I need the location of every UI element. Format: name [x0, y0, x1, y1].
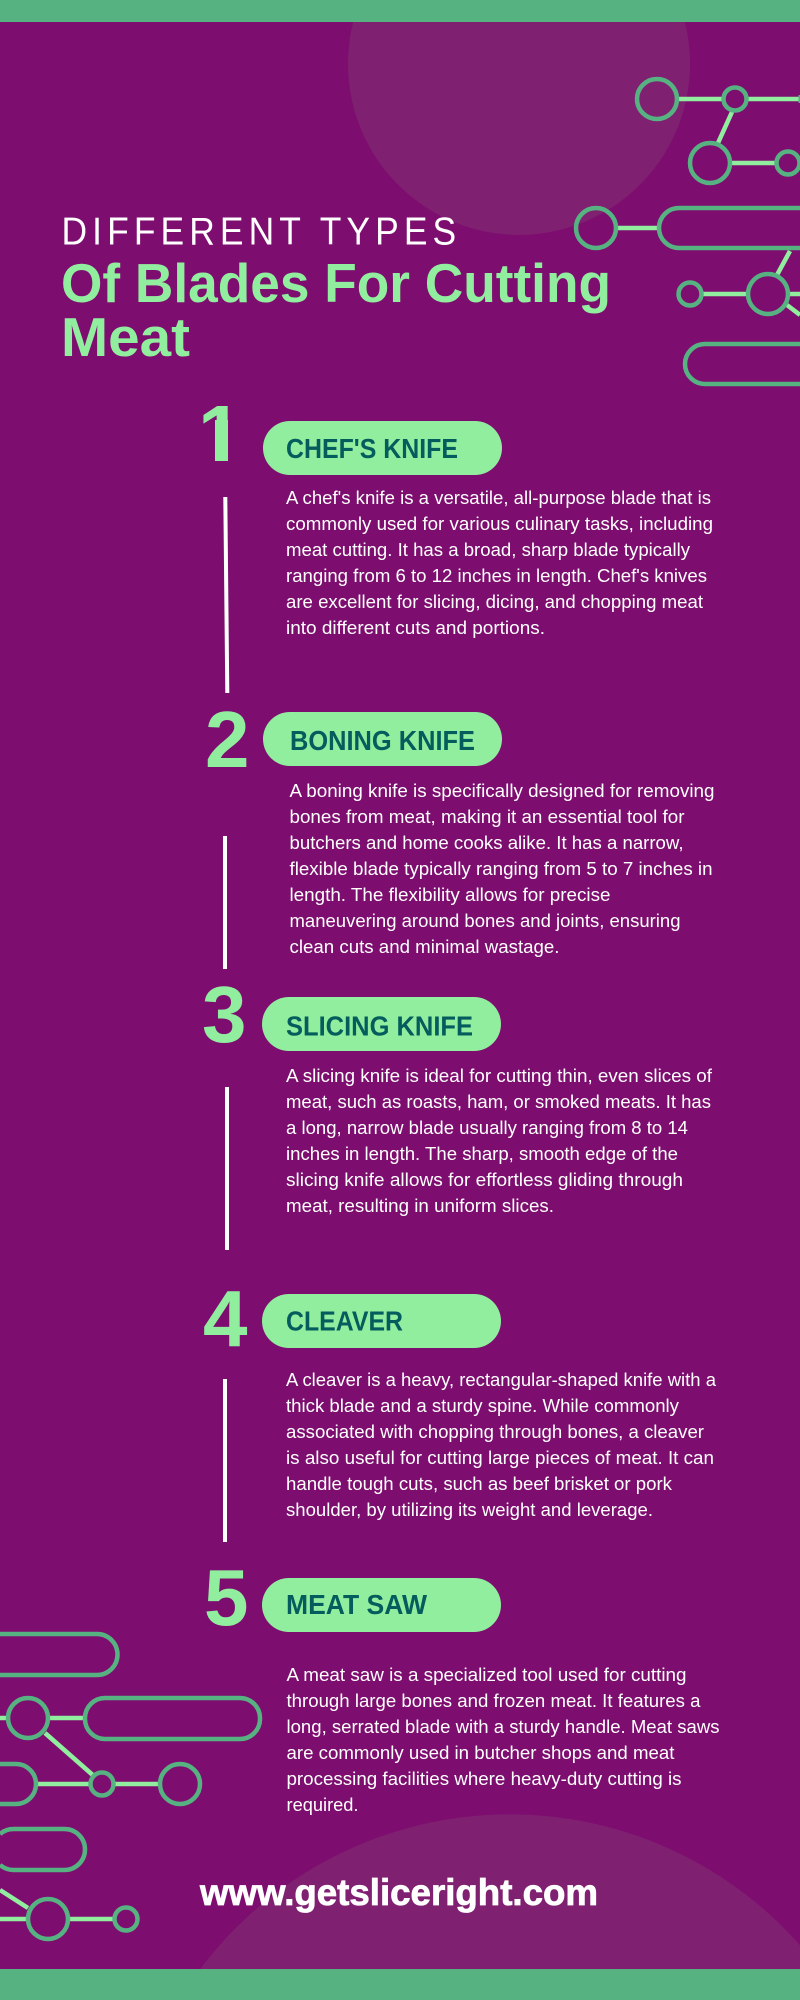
section 4: cleaver — [203, 1274, 717, 1542]
heading pill: chef's knife: CHEF'S KNIFE — [286, 433, 458, 464]
number 1: 1 — [198, 389, 242, 478]
heading pill: boning knife: BONING KNIFE — [290, 725, 475, 756]
heading pill: boning knife — [263, 712, 502, 766]
body text 2: length. The flexibility allows for precise — [290, 884, 610, 905]
body text 2: maneuvering around bones and joints, ensuring — [290, 910, 680, 931]
body text 2: A boning knife is specifically designed for removing — [290, 780, 714, 801]
body text 1: A chef's knife is a versatile, all-purpose blade that is — [286, 487, 711, 508]
body text 5 — [286, 1664, 720, 1815]
body text 4: thick blade and a sturdy spine. While commonly — [286, 1395, 680, 1416]
heading pill: chef's knife — [263, 421, 502, 475]
number 4: 4 — [203, 1274, 248, 1363]
body text 4 — [286, 1369, 717, 1520]
body text 1: commonly used for various culinary tasks, including — [286, 513, 713, 534]
circuit decoration bottom left — [0, 1634, 260, 1939]
connector line 1 — [225, 497, 227, 693]
title line: meat: Meat — [61, 306, 190, 368]
body text 4: shoulder, by utilizing its weight and leverage. — [286, 1499, 653, 1520]
body text 2: butchers and home cooks alike. It has a narrow, — [290, 832, 684, 853]
body text 1: ranging from 6 to 12 inches in length. Chef's knives — [286, 565, 707, 586]
heading pill: cleaver: CLEAVER — [286, 1306, 403, 1336]
body text 5: through large bones and frozen meat. It features a — [286, 1690, 701, 1711]
number 2: 2 — [205, 695, 250, 784]
body text 3: inches in length. The sharp, smooth edge of the — [286, 1143, 678, 1164]
body text 5: A meat saw is a specialized tool used for cutting — [286, 1664, 686, 1685]
body text 1: are excellent for slicing, dicing, and chopping meat — [286, 591, 703, 612]
heading pill: slicing knife — [262, 997, 501, 1051]
body text 3: slicing knife allows for effortless gliding through — [286, 1169, 683, 1190]
body text 5: processing facilities where heavy-duty cutting is — [286, 1768, 682, 1789]
body text 4: associated with chopping through bones, a cleaver — [286, 1421, 704, 1442]
section 1: chef's knife — [198, 389, 713, 693]
heading pill: meat saw — [262, 1578, 501, 1632]
number 3: 3 — [202, 970, 246, 1059]
section 3: slicing knife — [202, 970, 713, 1250]
body text 3: A slicing knife is ideal for cutting thin, even slices of — [286, 1065, 713, 1086]
section 5: meat saw — [204, 1553, 720, 1815]
circuit decoration top right — [576, 79, 800, 384]
body text 1 — [286, 487, 713, 638]
connector line 4 — [223, 1379, 227, 1542]
body text 4: A cleaver is a heavy, rectangular-shaped knife with a — [286, 1369, 717, 1390]
body text 4: is also useful for cutting large pieces of meat. It can — [286, 1447, 714, 1468]
connector line 3 — [225, 1087, 229, 1250]
title line: different types: DIFFERENT TYPES — [62, 210, 456, 253]
bottom bar — [0, 1969, 800, 2000]
body text 5: required. — [286, 1794, 358, 1815]
website url: www.getsliceright.com — [199, 1872, 598, 1913]
body text 2: flexible blade typically ranging from 5 to 7 inches in — [290, 858, 712, 879]
body text 4: handle tough cuts, such as beef brisket or pork — [286, 1473, 673, 1494]
heading pill: cleaver — [262, 1294, 501, 1348]
body text 5: are commonly used in butcher shops and meat — [286, 1742, 674, 1763]
body text 3 — [286, 1065, 713, 1216]
decorative circle bottom — [200, 1814, 800, 1969]
top bar — [0, 0, 800, 22]
heading pill: slicing knife: SLICING KNIFE — [286, 1010, 473, 1042]
body text 5: long, serrated blade with a sturdy handle. Meat saws — [286, 1716, 720, 1737]
body text 1: into different cuts and portions. — [286, 617, 545, 638]
title line: of blades for cutting: Of Blades For Cutting — [61, 252, 611, 314]
section 2: boning knife — [205, 695, 714, 969]
body text 3: a long, narrow blade usually ranging from 8 to 14 — [286, 1117, 688, 1138]
body text 2: clean cuts and minimal wastage. — [290, 936, 560, 957]
number 5: 5 — [204, 1553, 248, 1642]
heading pill: meat saw: MEAT SAW — [286, 1589, 427, 1620]
body text 1: meat cutting. It has a broad, sharp blade typically — [286, 539, 691, 560]
number 1 — [203, 406, 228, 461]
connector line 2 — [223, 836, 227, 969]
decorative circle top — [348, 22, 690, 235]
body text 2: bones from meat, making it an essential tool for — [290, 806, 684, 827]
body text 3: meat, such as roasts, ham, or smoked meats. It has — [286, 1091, 711, 1112]
body text 3: meat, resulting in uniform slices. — [286, 1195, 554, 1216]
title — [61, 210, 611, 368]
body text 2 — [290, 780, 714, 957]
